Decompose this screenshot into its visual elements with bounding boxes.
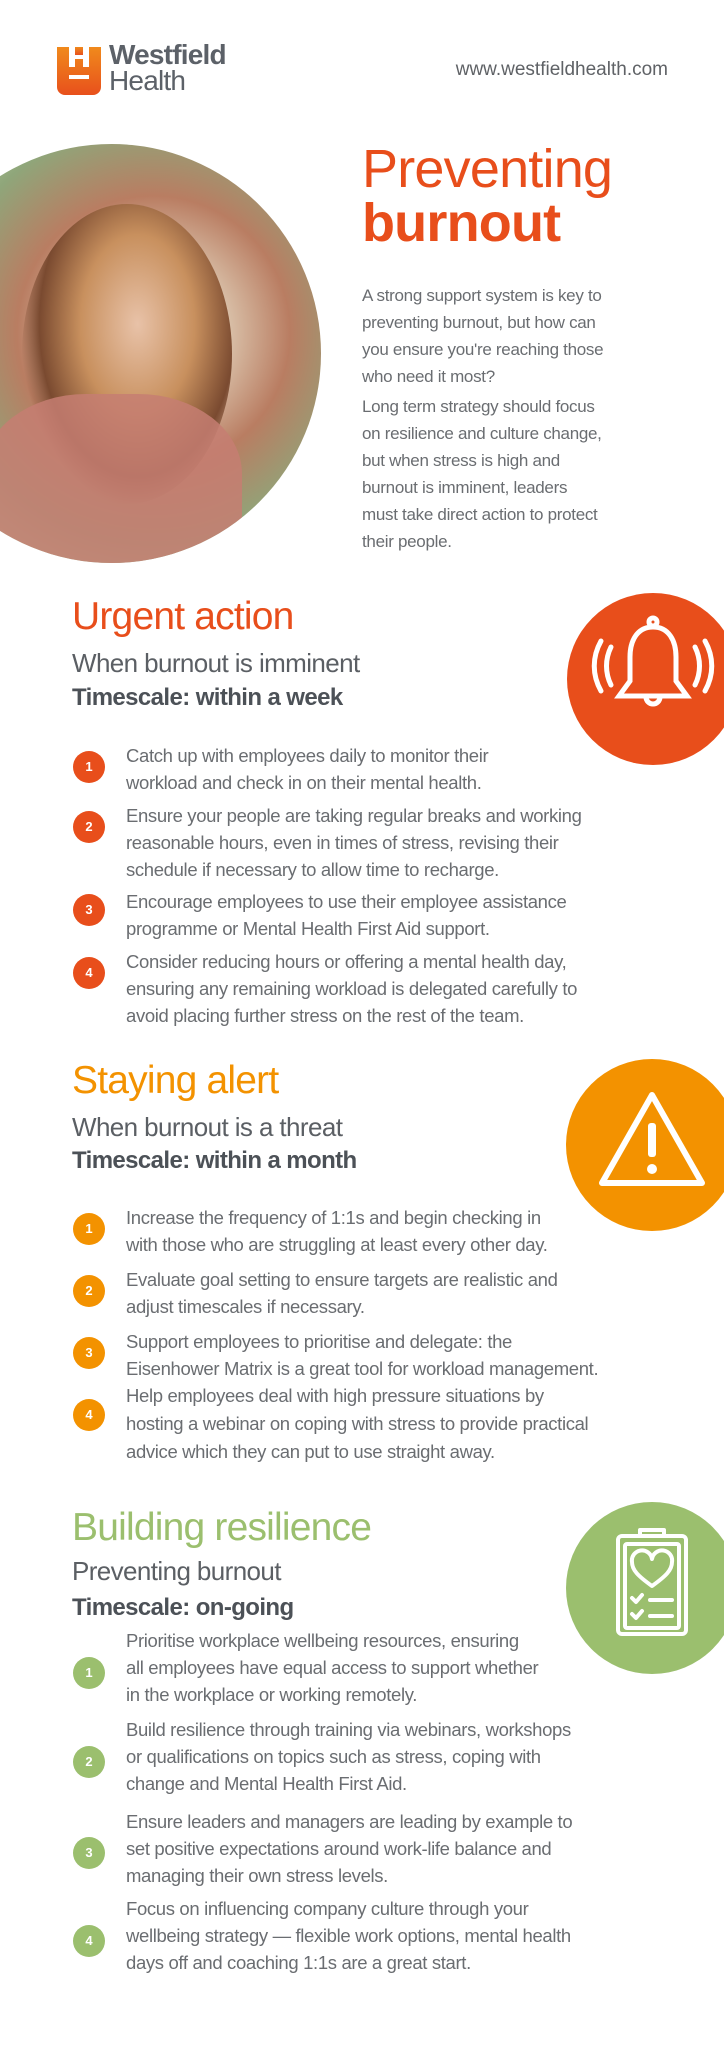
intro text 2: Long term strategy should focus	[362, 397, 595, 416]
icon: logo mark	[57, 47, 101, 95]
item 3	[73, 891, 566, 939]
item 2: 2	[85, 819, 93, 834]
item 3: programme or Mental Health First Aid support.	[126, 918, 490, 939]
item 2: Evaluate goal setting to ensure targets are realistic and	[126, 1269, 558, 1290]
item 2: schedule if necessary to allow time to recharge.	[126, 859, 499, 880]
timescale: Timescale: within a month	[72, 1147, 357, 1174]
item 1	[73, 745, 488, 793]
item 3	[73, 1331, 598, 1379]
item 4: ensuring any remaining workload is delegated carefully to	[126, 978, 577, 999]
item 1: 1	[85, 759, 93, 774]
item 4: 4	[85, 965, 93, 980]
logo text: Westfield	[109, 39, 226, 70]
item 2: Build resilience through training via webinars, workshops	[126, 1719, 571, 1740]
intro text: who need it most?	[362, 367, 495, 386]
panel: staying alert	[72, 1059, 724, 1462]
item 3: Encourage employees to use their employee assistance	[126, 891, 566, 912]
item 2	[73, 1719, 571, 1794]
panel: building resilience	[72, 1502, 724, 1973]
logo	[57, 39, 226, 96]
intro text 2	[362, 397, 602, 551]
intro text 2: burnout is imminent, leaders	[362, 478, 567, 497]
item 2	[73, 805, 582, 880]
item 4: Focus on influencing company culture through your	[126, 1898, 528, 1919]
item 4	[73, 951, 577, 1026]
subtitle: When burnout is imminent	[72, 648, 360, 678]
intro text: you ensure you're reaching those	[362, 340, 603, 359]
intro text 2: but when stress is high and	[362, 451, 560, 470]
title	[362, 139, 612, 253]
item 4: 4	[85, 1407, 93, 1422]
icon: bell	[567, 593, 724, 765]
item 2	[73, 1269, 558, 1317]
item 4	[73, 1898, 571, 1973]
icon: warning	[566, 1059, 724, 1231]
url: www.westfieldhealth.com	[456, 59, 668, 80]
item 4: hosting a webinar on coping with stress to provide practical	[126, 1413, 588, 1434]
heading: Staying alert	[72, 1059, 278, 1102]
item 4: avoid placing further stress on the rest of the team.	[126, 1005, 524, 1026]
item 3: 3	[85, 902, 93, 917]
item 3: Ensure leaders and managers are leading by example to	[126, 1811, 572, 1832]
photo circle	[0, 144, 321, 563]
item 2: 2	[85, 1283, 93, 1298]
item 2: or qualifications on topics such as stress, coping with	[126, 1746, 541, 1767]
timescale: Timescale: within a week	[72, 684, 343, 711]
subtitle: Preventing burnout	[72, 1556, 281, 1586]
item 1: workload and check in on their mental health.	[126, 772, 482, 793]
item 4: days off and coaching 1:1s are a great start.	[126, 1952, 471, 1973]
title: Preventing	[362, 139, 612, 199]
item 1	[73, 1630, 538, 1705]
heading: Urgent action	[72, 595, 294, 638]
item 1: Prioritise workplace wellbeing resources, ensuring	[126, 1630, 519, 1651]
item 1: Increase the frequency of 1:1s and begin checking in	[126, 1207, 541, 1228]
intro text 2: their people.	[362, 532, 452, 551]
title: burnout	[362, 193, 560, 253]
item 3: Support employees to prioritise and delegate: the	[126, 1331, 512, 1352]
heading: Building resilience	[72, 1506, 371, 1549]
item 1: Catch up with employees daily to monitor their	[126, 745, 488, 766]
item 2: 2	[85, 1754, 93, 1769]
item 2: change and Mental Health First Aid.	[126, 1773, 407, 1794]
item 3	[73, 1811, 572, 1886]
item 3: set positive expectations around work-life balance and	[126, 1838, 551, 1859]
panel: urgent action	[72, 593, 724, 1026]
item 1: in the workplace or working remotely.	[126, 1684, 417, 1705]
intro text	[362, 286, 603, 386]
item 2: reasonable hours, even in times of stress, revising their	[126, 832, 558, 853]
item 4: 4	[85, 1933, 93, 1948]
item 3: 3	[85, 1845, 93, 1860]
intro text 2: on resilience and culture change,	[362, 424, 602, 443]
intro text 2: must take direct action to protect	[362, 505, 597, 524]
item 3: managing their own stress levels.	[126, 1865, 388, 1886]
item 3: Eisenhower Matrix is a great tool for workload management.	[126, 1358, 598, 1379]
item 4	[73, 1385, 588, 1462]
item 2: adjust timescales if necessary.	[126, 1296, 365, 1317]
intro text: preventing burnout, but how can	[362, 313, 596, 332]
item 4: Help employees deal with high pressure situations by	[126, 1385, 544, 1406]
item 4: wellbeing strategy — flexible work options, mental health	[126, 1925, 571, 1946]
item 3: 3	[85, 1345, 93, 1360]
item 1: all employees have equal access to support whether	[126, 1657, 538, 1678]
logo text: Health	[109, 65, 185, 96]
item 1: with those who are struggling at least every other day.	[126, 1234, 548, 1255]
item 1	[73, 1207, 548, 1255]
logo text	[109, 39, 226, 96]
icon: clipboard heart	[566, 1502, 724, 1674]
item 4: Consider reducing hours or offering a mental health day,	[126, 951, 566, 972]
item 2: Ensure your people are taking regular breaks and working	[126, 805, 582, 826]
item 4: advice which they can put to use straight away.	[126, 1441, 495, 1462]
intro text: A strong support system is key to	[362, 286, 602, 305]
subtitle: When burnout is a threat	[72, 1112, 342, 1142]
item 1: 1	[85, 1221, 93, 1236]
item 1: 1	[85, 1665, 93, 1680]
timescale: Timescale: on-going	[72, 1594, 294, 1621]
